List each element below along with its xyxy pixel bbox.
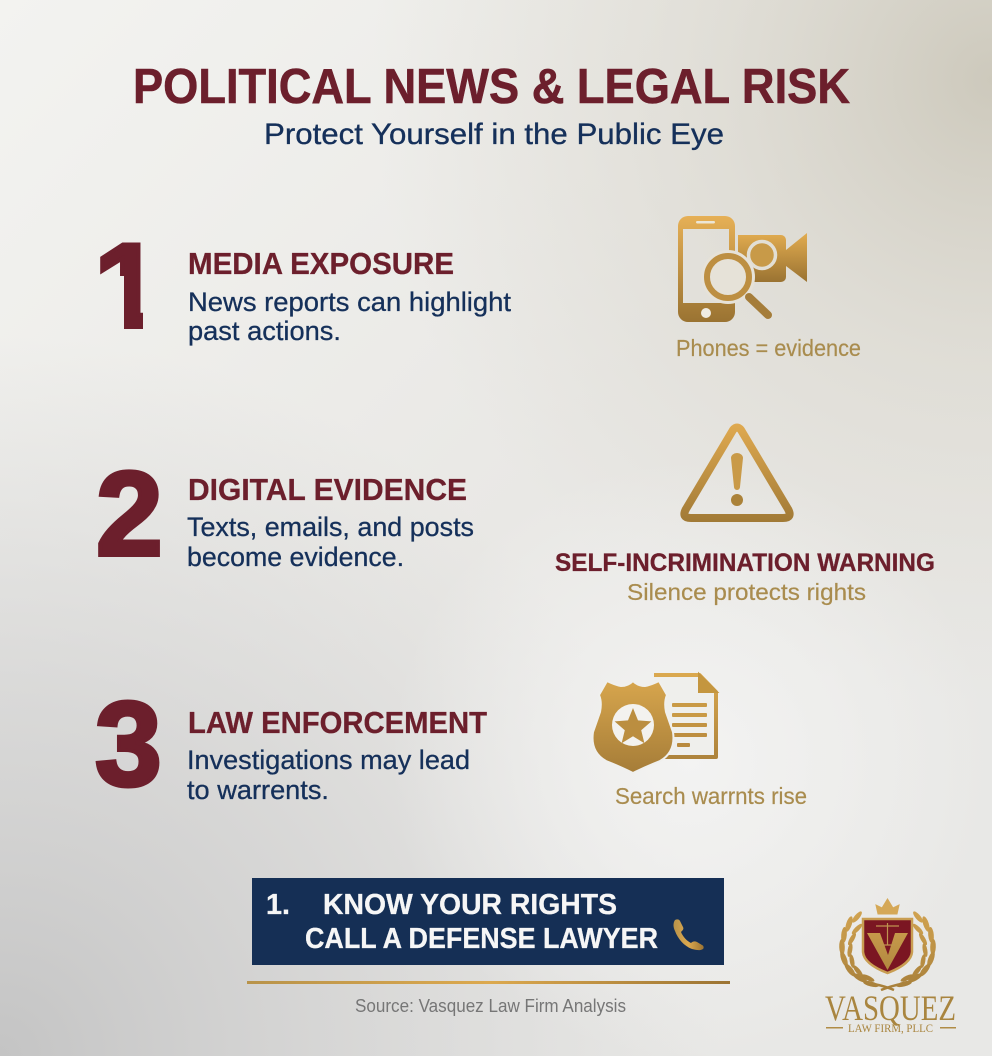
caption: phones = evidence: Phones = evidence [676,335,861,361]
call to action banner [252,878,724,965]
heading: law enforcement: LAW ENFORCEMENT [188,705,487,740]
text: media exposure description: past actions. [188,316,341,346]
heading: digital evidence: DIGITAL EVIDENCE [188,472,467,507]
laurel right [881,910,936,990]
text: law enforcement description [187,745,470,805]
icon: phone, magnifier and video camera [678,216,807,322]
source note: Source: Vasquez Law Firm Analysis [355,996,626,1016]
call to action banner: KNOW YOUR RIGHTS [323,889,617,921]
caption: search warrnts rise: Search warrnts rise [615,783,807,809]
text: media exposure description: News reports can highlight [188,287,511,317]
number 3: 3 [95,677,162,811]
text: digital evidence description: become evidence. [187,542,404,572]
item 2: digital evidence [96,447,474,581]
title: POLITICAL NEWS & LEGAL RISK [133,60,850,114]
item 1: media exposure [100,242,511,346]
icon: warning triangle [684,428,790,518]
text: law enforcement description: to warrents. [187,775,329,805]
icon: telephone [674,919,704,950]
call to action banner: CALL A DEFENSE LAWYER [305,923,658,955]
item 3: law enforcement [95,677,487,811]
callout heading: self-incrimination warning: SELF-INCRIMINATION WARNING [555,549,935,577]
text: digital evidence description [187,512,474,572]
caption: silence protects rights: Silence protects rights [627,579,866,605]
number 2: 2 [96,447,163,581]
call to action banner: 1. [266,889,290,921]
firm name: VASQUEZ [825,988,956,1028]
laurel left [839,910,894,990]
number 1: 1 [94,219,161,353]
gold divider [247,981,730,984]
icon: police badge and document [593,674,717,773]
subtitle: Protect Yourself in the Public Eye [264,118,724,151]
firm type: LAW FIRM, PLLC [848,1021,933,1035]
logo: Vasquez Law Firm [825,899,956,1035]
text: law enforcement description: Investigations may lead [187,745,470,775]
text: digital evidence description: Texts, emails, and posts [187,512,474,542]
heading: media exposure: MEDIA EXPOSURE [188,246,454,281]
text: media exposure description [188,287,511,346]
crown [876,899,899,914]
shield [863,919,912,973]
